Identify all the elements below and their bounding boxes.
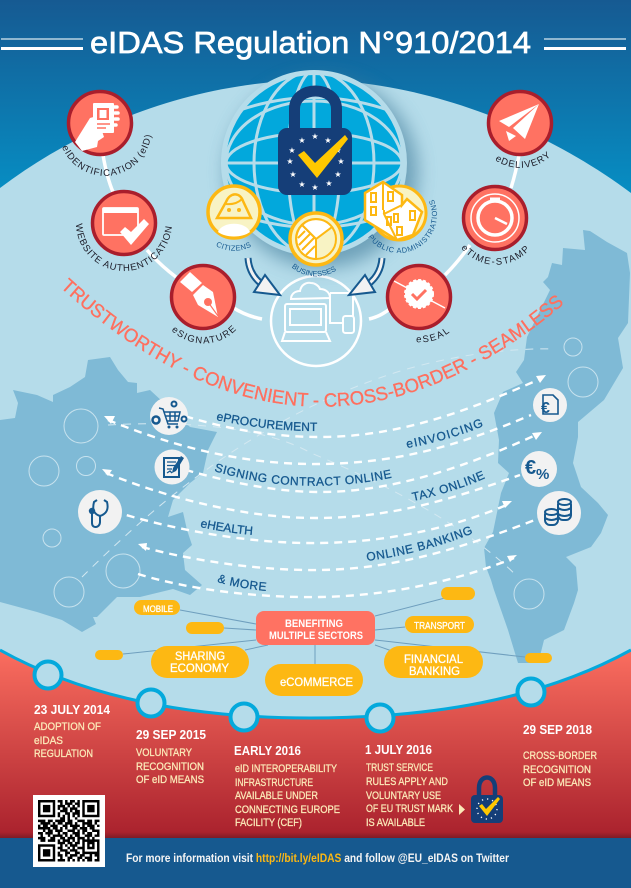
milestone: 1 July 2016: VOLUNTARY USE [366,790,441,802]
sector pills: SHARING [175,651,225,663]
milestone: 23 July 2014 [34,703,110,760]
footer bar [0,838,631,888]
padlock: ★ [311,132,319,141]
icon: businesses [290,213,342,265]
label: eSignature: eSIGNATURE [172,325,236,344]
arrow: left into services [248,258,280,295]
sector pills: FINANCIAL [404,654,464,666]
milestone: 29 Sep 2018: CROSS-BORDER [523,750,597,762]
icon: euro percent [521,451,557,487]
milestone: 1 July 2016 [365,743,454,829]
label: eDelivery: eDELIVERY [496,151,549,168]
icon: eSeal [388,266,450,328]
milestone: 29 Sep 2018: RECOGNITION [523,764,591,776]
padlock: ★ [337,157,345,166]
map: France [0,357,217,632]
title: eIDAS Regulation N°910/2014 [90,25,531,60]
milestone: 23 July 2014: 23 JULY 2014 [34,703,110,717]
sector pills: ECONOMY [170,663,229,675]
route labels: ePROCUREMENT [216,413,318,432]
icon: signed contract [154,450,190,484]
milestone: early 2016: CONNECTING EUROPE [235,804,340,816]
globe with EU trust padlock [221,70,418,268]
milestone: 29 Sep 2015: 29 SEP 2015 [136,728,206,742]
label: businesses: BUSINESSES [292,264,336,276]
route labels: eHEALTH [200,520,252,535]
icon: coins [537,491,581,535]
milestone: early 2016: FACILITY (CEF) [235,817,302,829]
faint flight routes [82,349,552,577]
icon: EU trust mark pointer [459,804,465,815]
milestone: early 2016: AVAILABLE UNDER [235,790,318,802]
timeline markers [34,662,544,732]
padlock: ★ [288,146,296,155]
icon: shopping cart [150,397,188,435]
sector pills: MOBILE [143,604,173,615]
icon: euro percent: % [536,466,549,483]
map: Sweden [484,230,630,663]
sector pills: TRANSPORT [414,620,465,632]
label: eSeal: eSEAL [416,329,450,342]
milestone: 29 Sep 2018: OF eID MEANS [523,777,591,789]
sector pills [95,587,552,696]
icon: euro invoice [533,388,567,422]
milestone: 29 Sep 2015: OF eID MEANS [136,774,204,786]
route labels: SIGNING CONTRACT ONLINE [214,464,392,486]
padlock: ★ [286,157,294,166]
padlock [278,91,352,195]
icon: eTime-stamp [464,186,526,250]
padlock: ★ [289,170,297,179]
label: citizens: CITIZENS [216,242,251,251]
route labels [200,413,485,591]
label: website authentication: WEBSITE AUTHENTICATION [76,223,172,272]
slogan: TRUSTWORTHY - CONVENIENT - CROSS-BORDER - SEAMLESS [64,278,562,407]
sector hub [256,611,375,645]
milestone: early 2016: EARLY 2016 [234,744,301,758]
milestone: 29 Sep 2015: VOLUNTARY [136,747,193,759]
icon: euro percent: € [525,457,536,479]
connector lines between trust services [103,155,519,319]
milestone: 23 July 2014: REGULATION [34,748,93,760]
milestone: 23 July 2014: ADOPTION OF [34,721,101,733]
route labels: ONLINE BANKING [366,526,472,561]
milestone: 1 July 2016: IS AVAILABLE [366,817,425,829]
route labels: TAX ONLINE [411,470,485,500]
icon: public administrations [365,182,426,240]
padlock: ★ [325,179,333,188]
icon: euro invoice: € [541,400,550,417]
timeline line [0,650,631,718]
padlock: ★ [311,183,319,192]
label: eIdentification: eIDENTIFICATION (eID) [62,135,153,176]
sector pills: eCOMMERCE [280,675,353,689]
route arrowheads [102,375,546,562]
padlock: ★ [298,180,306,189]
central online services circle [271,276,361,366]
milestone: 23 July 2014: eIDAS [34,735,63,747]
route labels: eINVOICING [406,419,482,448]
milestone: early 2016: eID INTEROPERABILITY [235,763,338,775]
label: public administrations: PUBLIC ADMINISTRATIONS [368,200,438,253]
icon: eDelivery [488,92,552,154]
milestone: early 2016 [234,744,340,829]
icon: eIdentification [68,92,132,154]
padlock: ★ [334,146,342,155]
icon: eSignature [172,266,234,328]
milestone: 1 July 2016: TRUST SERVICE [366,762,433,774]
padlock: ★ [334,170,342,179]
icon: EU trust mark padlock [471,778,503,823]
footer text: For more information visit http://bit.ly/eIDAS and follow @EU_eIDAS on Twitter [126,853,509,865]
map city markers [29,338,598,609]
milestone: 1 July 2016: OF EU TRUST MARK [366,803,454,815]
sector hub: BENEFITING [285,618,343,630]
globe shadow [226,76,418,268]
padlock: ★ [324,136,332,145]
milestone: 29 Sep 2018: 29 SEP 2018 [523,723,592,737]
arrow: right into services [349,258,382,295]
milestone: 29 Sep 2015 [136,728,206,786]
QR code [33,795,105,867]
dashed exchange routes [100,379,540,597]
milestone: 29 Sep 2015: RECOGNITION [136,761,204,773]
sector connector lines [123,598,525,664]
icon: website authentication [92,192,156,254]
sector pills: BANKING [409,666,460,678]
icon: stethoscope [78,490,122,534]
icon: citizens [208,186,260,238]
label: eTime-stamp: eTIME-STAMP [462,246,527,265]
milestone: early 2016: INFRASTRUCTURE [235,777,313,789]
route labels: & MORE [218,574,266,591]
sector hub: MULTIPLE SECTORS [269,630,363,642]
milestone: 1 July 2016: RULES APPLY AND [366,776,448,788]
milestone: 29 Sep 2018 [523,723,597,789]
milestone: 1 July 2016: 1 JULY 2016 [365,743,432,757]
title [1,25,626,60]
padlock: ★ [298,136,306,145]
